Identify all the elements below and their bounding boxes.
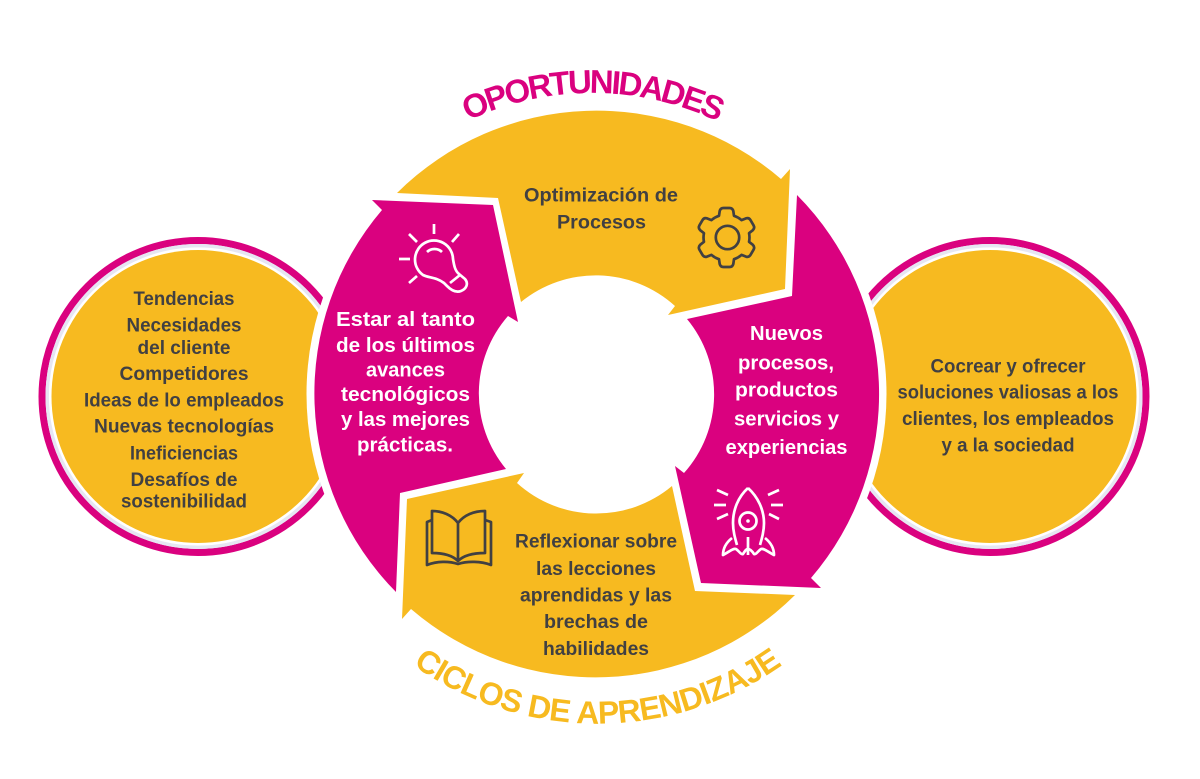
text: right circle: Cocrear y ofrecer xyxy=(930,356,1086,377)
text: stay up to date: Estar al tanto xyxy=(336,309,475,331)
icon: open book xyxy=(427,511,491,565)
text: right circle: soluciones valiosas a los xyxy=(898,382,1118,403)
text: left circle list: Ideas de lo empleados xyxy=(84,391,284,412)
icon: gear xyxy=(695,208,758,267)
text: left circle list: Tendencias xyxy=(134,289,234,310)
text: right circle: y a la sociedad xyxy=(942,436,1074,457)
text: reflect on lessons: brechas de xyxy=(544,612,648,633)
text: new processes: productos xyxy=(735,380,838,402)
text: stay up to date: de los últimos xyxy=(336,335,475,357)
text: stay up to date: prácticas. xyxy=(357,435,453,457)
text: left circle list: Competidores xyxy=(120,364,248,385)
arrow: right magenta segment xyxy=(675,195,879,588)
icon: light bulb xyxy=(399,224,467,292)
text: right circle xyxy=(898,356,1118,457)
text: stay up to date xyxy=(336,309,475,457)
text: reflect on lessons: Reflexionar sobre xyxy=(515,531,677,552)
white halo behind the cycle xyxy=(306,104,886,684)
text: left circle list: Nuevas tecnologías xyxy=(94,417,274,438)
text: process optimization: Procesos xyxy=(557,212,646,233)
text: left circle list: Desafíos de xyxy=(130,470,238,491)
text: reflect on lessons: habilidades xyxy=(543,639,649,660)
text: process optimization: Optimización de xyxy=(524,186,678,207)
text: new processes: procesos, xyxy=(738,352,834,374)
text: new processes: servicios y xyxy=(734,409,840,431)
text: left circle list: Necesidades xyxy=(126,316,242,337)
text: reflect on lessons: aprendidas y las xyxy=(520,586,672,607)
text: left circle list xyxy=(84,289,284,513)
text: stay up to date: avances xyxy=(366,360,445,382)
heading: CICLOS DE APRENDIZAJE: CICLOS DE APRENDIZAJE xyxy=(418,648,782,724)
text: reflect on lessons: las lecciones xyxy=(536,559,656,580)
text: right circle: clientes, los empleados xyxy=(902,409,1114,430)
heading: OPORTUNIDADES: OPORTUNIDADES xyxy=(464,70,724,119)
text: new processes: Nuevos xyxy=(750,323,823,345)
text: stay up to date: tecnológicos xyxy=(341,384,470,406)
text: new processes: experiencias xyxy=(726,437,848,459)
text: left circle list: del cliente xyxy=(138,338,230,359)
text: new processes xyxy=(726,323,848,459)
text: stay up to date: y las mejores xyxy=(341,409,470,431)
panel: left circle xyxy=(42,240,354,552)
arrow: bottom yellow segment xyxy=(402,473,795,677)
arrow: left magenta segment xyxy=(314,200,518,592)
arrow: top yellow segment xyxy=(397,111,790,315)
panel: right circle xyxy=(834,240,1146,552)
text: left circle list: Ineficiencias xyxy=(130,443,238,464)
text: left circle list: sostenibilidad xyxy=(121,492,247,513)
text: process optimization xyxy=(524,186,678,233)
text: reflect on lessons xyxy=(515,531,677,660)
icon: rocket xyxy=(714,488,783,555)
